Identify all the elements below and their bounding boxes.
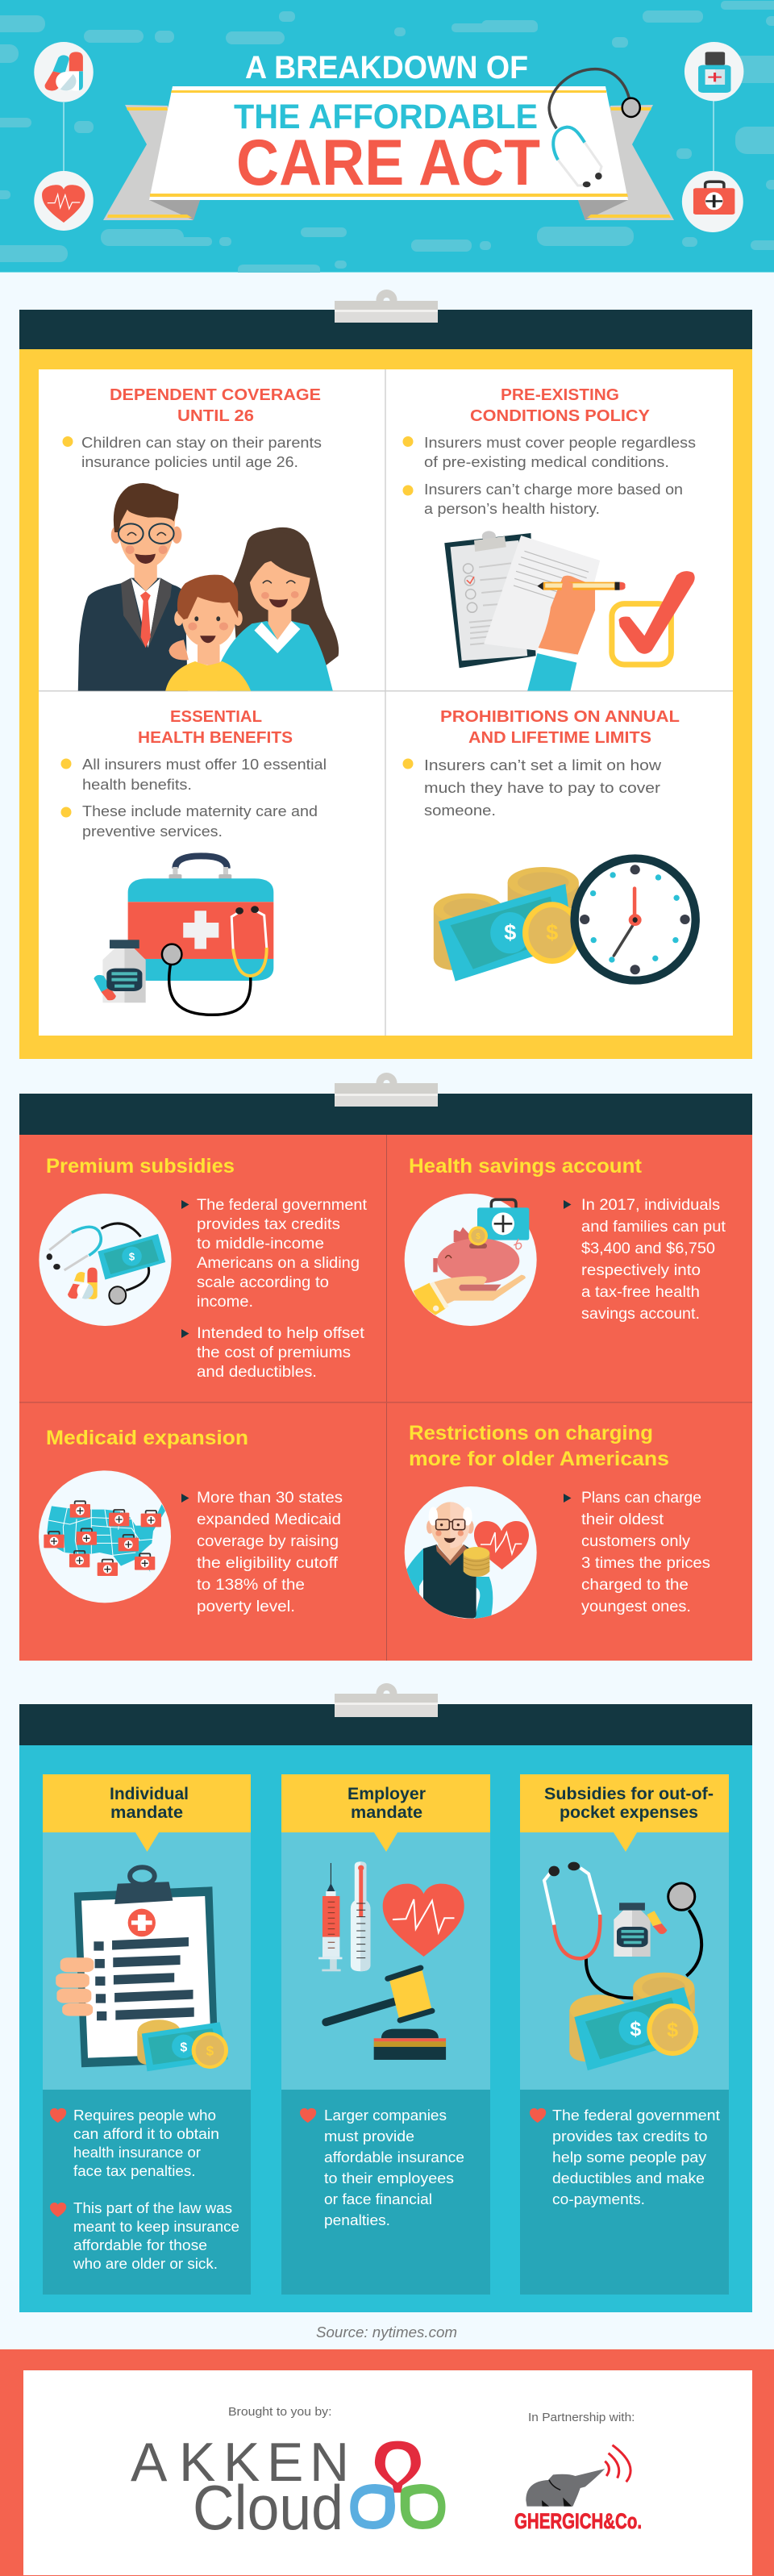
bullet text: or face financial (324, 2191, 432, 2207)
heading: UNTIL 26 (177, 406, 254, 425)
bullet text: someone. (424, 802, 496, 819)
bullet text: More than 30 states (197, 1490, 343, 1507)
bullet text (50, 2107, 239, 2272)
heading: DEPENDENT COVERAGE (110, 386, 321, 404)
illustration: stethoscope, bottle, money (544, 1862, 701, 2070)
card: prohibitions on limits (403, 707, 700, 985)
sponsor: Ghergich & Co. (514, 2411, 642, 2533)
icon: pills (34, 42, 94, 102)
bullet text: penalties. (324, 2212, 390, 2228)
bullet text: Plans can charge (581, 1490, 701, 1507)
column: employer mandate (281, 1774, 490, 2295)
bullet text: and deductibles. (197, 1364, 317, 1381)
sponsor: Akken Cloud: Brought to you by: (228, 2405, 332, 2419)
bullet text: a person’s health history. (424, 500, 600, 517)
bullet text (530, 2107, 720, 2207)
card: older Americans (405, 1422, 710, 1619)
bullet text: deductibles and make (552, 2170, 705, 2186)
illustration: clipboard with hand: $ (206, 2043, 214, 2058)
bullet text: provides tax credits to (552, 2128, 708, 2145)
bullet text: Americans on a sliding (197, 1255, 360, 1272)
heading: PROHIBITIONS ON ANNUAL (440, 707, 680, 726)
bullet text: a tax-free health (581, 1284, 700, 1301)
illustration: money and clock: $ (504, 920, 516, 944)
bullet text: poverty level. (197, 1599, 295, 1615)
footer panel (0, 2349, 774, 2576)
bullet text (403, 434, 696, 517)
illustration: stethoscope, bottle, money: $ (667, 2019, 678, 2041)
card: essential health benefits (61, 707, 327, 1015)
bullet text: much they have to pay to cover (424, 779, 660, 796)
bullet text: youngest ones. (581, 1599, 691, 1615)
bullet text: can afford it to obtain (73, 2126, 219, 2142)
card: premium subsidies (39, 1155, 368, 1381)
heading: Restrictions on charging (409, 1422, 653, 1444)
panel: cyan board (19, 1745, 752, 2312)
heading (409, 1422, 669, 1470)
sponsor: Ghergich & Co.: GHERGICH&Co. (514, 2509, 642, 2533)
bullet text: must provide (324, 2128, 414, 2145)
illustration: stethoscope, bottle, money: $ (630, 2018, 641, 2040)
bullet text (564, 1197, 726, 1323)
sponsor: Akken Cloud (131, 2405, 445, 2543)
bullet text (300, 2107, 464, 2228)
bullet text (181, 1197, 368, 1381)
panel: yellow board (19, 349, 752, 1059)
heading tag: pocket expenses (560, 1803, 698, 1822)
bullet text: Larger companies (324, 2107, 447, 2124)
clipboard clip 3 (19, 1683, 752, 1745)
source: Source: nytimes.com (316, 2324, 457, 2340)
bullet text: provides tax credits (197, 1216, 340, 1233)
heading: HEALTH BENEFITS (138, 728, 293, 747)
illustration: syringe, thermometer, heart, gavel (318, 1861, 464, 2060)
heading: Premium subsidies (46, 1155, 235, 1178)
heading tag (281, 1774, 490, 1852)
heading (138, 707, 293, 747)
illustration: medical kit (94, 856, 273, 1015)
bullet text: This part of the law was (73, 2200, 232, 2216)
heading: AND LIFETIME LIMITS (468, 728, 651, 747)
bullet text (403, 757, 662, 819)
icon: banner stethoscope (549, 69, 640, 187)
logo: elephant (526, 2445, 630, 2507)
icon circle: US map with kits (39, 1470, 171, 1603)
bullet text: Insurers must cover people regardless (424, 434, 696, 451)
bullet text: Insurers can’t charge more based on (424, 481, 683, 498)
card: medicaid expansion (39, 1427, 343, 1615)
bullet text: charged to the (581, 1577, 689, 1594)
heading: Medicaid expansion (46, 1427, 248, 1449)
logo mark (350, 2441, 445, 2529)
bullet text: preventive services. (82, 823, 223, 840)
heading tag: mandate (110, 1803, 183, 1822)
title (234, 50, 540, 199)
illustration: clipboard and check (444, 531, 695, 691)
banner ribbon (103, 86, 674, 220)
bullet text: Intended to help offset (197, 1325, 365, 1342)
illustration: clipboard with hand (56, 1867, 228, 2071)
bullet text: to middle-income (197, 1236, 324, 1253)
icon circle: stethoscope, bill, pills (39, 1194, 172, 1326)
illustration: money and clock: $ (546, 920, 558, 944)
bullet text: who are older or sick. (73, 2256, 218, 2272)
heading: PRE-EXISTING (501, 386, 619, 404)
panel: red board (19, 1135, 752, 1661)
bullet text: customers only (581, 1533, 691, 1550)
bullet text: affordable insurance (324, 2149, 464, 2165)
sponsor: Akken Cloud: AKKEN (131, 2432, 349, 2493)
bullet text: face tax penalties. (73, 2163, 195, 2179)
title: A BREAKDOWN OF (245, 50, 528, 85)
title: THE AFFORDABLE (234, 98, 538, 136)
bullet text: In 2017, individuals (581, 1197, 720, 1214)
card: dependent coverage (63, 386, 339, 691)
icon: heart (34, 171, 94, 231)
title: CARE ACT (236, 127, 540, 199)
bullet text: savings account. (581, 1306, 700, 1323)
bullet text: 3 times the prices (581, 1555, 710, 1572)
heading tag (520, 1774, 729, 1852)
heading: more for older Americans (409, 1448, 669, 1470)
bullet text: respectively into (581, 1262, 701, 1279)
bullet text: the eligibility cutoff (197, 1555, 339, 1572)
bullet text: of pre-existing medical conditions. (424, 453, 669, 470)
heading: Health savings account (409, 1155, 643, 1178)
bullet text: to 138% of the (197, 1577, 305, 1594)
bullet text (63, 434, 322, 470)
card: health savings account (405, 1155, 726, 1326)
icon circle: piggy bank: $ (476, 1232, 481, 1241)
icon: first aid kit (682, 171, 743, 232)
bullet text: co-payments. (552, 2191, 645, 2207)
icon: medicine bottle (685, 42, 743, 101)
heading (440, 707, 680, 747)
heading (110, 386, 321, 425)
bullet text: income. (197, 1294, 253, 1311)
bullet text: The federal government (552, 2107, 720, 2124)
bullet text: their oldest (581, 1511, 664, 1528)
heading tag: mandate (351, 1803, 422, 1822)
bullet text: to their employees (324, 2170, 454, 2186)
bullet text: the cost of premiums (197, 1344, 351, 1361)
illustration: family (78, 483, 339, 691)
bullet text: Requires people who (73, 2107, 216, 2124)
header icons: connector lines (64, 101, 714, 171)
bullet text: $3,400 and $6,750 (581, 1240, 715, 1257)
bullet text: affordable for those (73, 2237, 207, 2253)
bullet text (181, 1490, 343, 1615)
icon circle: piggy bank (405, 1194, 537, 1326)
bullet text: and families can put (581, 1219, 726, 1236)
header background (0, 0, 774, 273)
clipboard clip 1 (19, 290, 752, 349)
sponsor: Akken Cloud: Cloud (193, 2472, 343, 2543)
heading (470, 386, 650, 425)
icon circle: senior man (405, 1486, 537, 1619)
bullet text (564, 1490, 710, 1615)
bullet text: scale according to (197, 1274, 329, 1291)
column: individual mandate (43, 1774, 251, 2295)
icon circle: stethoscope, bill, pills: $ (129, 1251, 135, 1263)
bullet text: The federal government (197, 1197, 368, 1214)
heading tag: Subsidies for out-of- (544, 1785, 714, 1803)
bullet text: These include maternity care and (82, 802, 318, 819)
bullet text: health benefits. (82, 776, 192, 793)
heading tag (43, 1774, 251, 1852)
sponsor: Ghergich & Co.: In Partnership with: (528, 2411, 635, 2424)
bullet text: help some people pay (552, 2149, 706, 2165)
heading tag: Individual (110, 1785, 189, 1803)
bullet text: All insurers must offer 10 essential (82, 756, 327, 773)
card: pre-existing conditions (403, 386, 696, 691)
illustration: clipboard with hand: $ (180, 2040, 187, 2054)
column: subsidies for out-of-pocket (520, 1774, 729, 2295)
heading: ESSENTIAL (170, 707, 262, 726)
bullet text (61, 756, 327, 840)
heading: CONDITIONS POLICY (470, 406, 650, 425)
bullet text: Insurers can’t set a limit on how (424, 757, 662, 773)
illustration: money and clock (434, 854, 700, 985)
bullet text: Children can stay on their parents (81, 434, 322, 451)
bullet text: expanded Medicaid (197, 1511, 341, 1528)
heading tag: Employer (347, 1785, 426, 1803)
bullet text: coverage by raising (197, 1533, 339, 1550)
bullet text: insurance policies until age 26. (81, 453, 298, 470)
bullet text: meant to keep insurance (73, 2219, 239, 2235)
clipboard clip 2 (19, 1073, 752, 1135)
bullet text: health insurance or (73, 2145, 201, 2161)
